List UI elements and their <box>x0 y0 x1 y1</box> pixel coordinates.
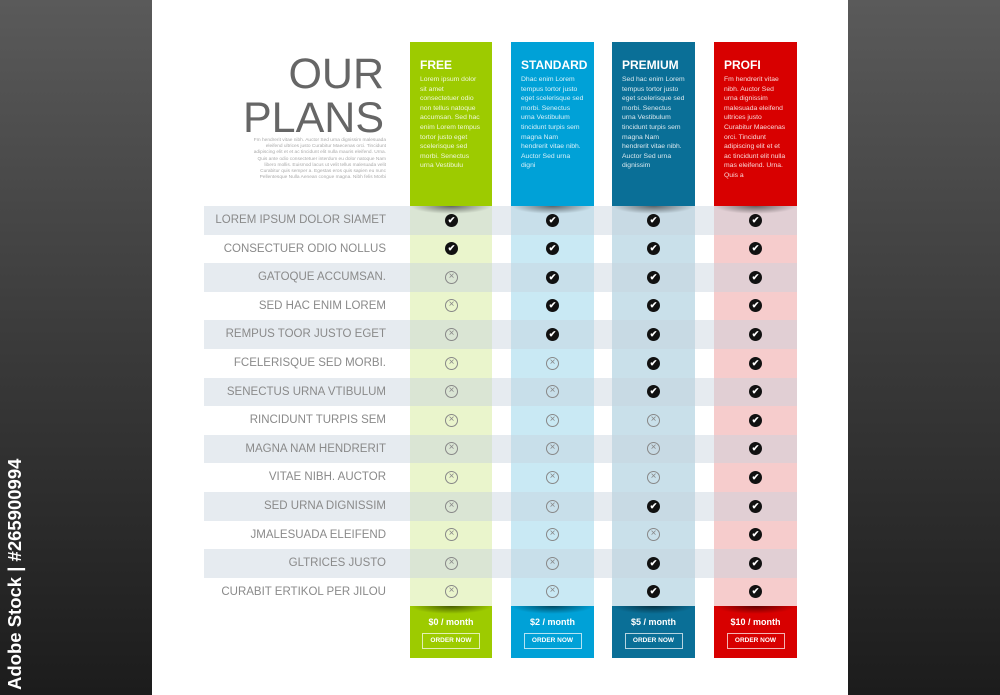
row 4: SED HAC ENIM LOREM <box>259 300 386 312</box>
row 2: ✔ <box>549 243 556 253</box>
row 10: × <box>550 471 555 482</box>
footer: profi <box>714 606 797 658</box>
row 5 <box>226 328 762 341</box>
row 8: × <box>550 414 555 425</box>
row 8: RINCIDUNT TURPIS SEM <box>250 414 386 426</box>
footer: premium <box>612 606 695 658</box>
row 2: ✔ <box>752 243 759 253</box>
footer: free: ORDER NOW <box>430 637 472 644</box>
row 9: ✔ <box>752 443 759 453</box>
header: premium <box>612 42 695 206</box>
row 13: ✔ <box>650 558 657 568</box>
footer: standard: $2 / month <box>530 617 575 627</box>
row 2 <box>224 242 762 255</box>
row 4: ✔ <box>650 300 657 310</box>
row 14: × <box>550 585 555 596</box>
row 5: × <box>449 328 454 339</box>
row 1: ✔ <box>650 214 657 224</box>
row 12: ✔ <box>752 529 759 539</box>
row 11: × <box>449 500 454 510</box>
column tints <box>410 206 492 606</box>
row 3: × <box>449 271 454 282</box>
row 12 <box>250 528 762 541</box>
row 1: ✔ <box>448 214 455 224</box>
row 9: × <box>651 442 656 453</box>
row 9: × <box>550 442 555 453</box>
row 7: × <box>550 385 555 396</box>
row 1: ✔ <box>752 214 759 224</box>
header: profi: PROFI <box>724 58 761 72</box>
header: premium: PREMIUM <box>622 58 679 72</box>
row 12: × <box>550 528 555 539</box>
row 11 <box>264 500 762 513</box>
row 14: ✔ <box>752 586 759 596</box>
row 4: ✔ <box>549 300 556 310</box>
title: OUR <box>288 50 384 98</box>
row 1 <box>215 214 762 227</box>
row 7: × <box>449 385 454 396</box>
row 7: ✔ <box>650 386 657 396</box>
row 3: ✔ <box>650 272 657 282</box>
row 12: × <box>651 528 656 539</box>
row 11: × <box>550 500 555 510</box>
row 13: × <box>449 557 454 568</box>
row 14: CURABIT ERTIKOL PER JILOU <box>221 586 386 598</box>
footer: profi: ORDER NOW <box>735 637 776 644</box>
row 10: × <box>449 471 454 482</box>
row 11: ✔ <box>650 500 657 510</box>
row 10 <box>269 471 762 484</box>
row 3: ✔ <box>549 272 556 282</box>
row 14: × <box>449 585 454 596</box>
title: PLANS <box>243 94 384 142</box>
row 4 <box>259 299 762 312</box>
row 9: MAGNA NAM HENDRERIT <box>245 443 386 455</box>
row 6 <box>234 356 762 370</box>
row 6: × <box>449 356 454 368</box>
row 13 <box>289 557 762 570</box>
title <box>243 50 384 142</box>
footer: free: $0 / month <box>428 617 474 627</box>
header: standard <box>511 42 594 206</box>
row 10: ✔ <box>752 472 759 482</box>
row 5: ✔ <box>549 329 556 339</box>
row 6: × <box>550 356 555 368</box>
footer: standard <box>511 606 594 658</box>
row 12: JMALESUADA ELEIFEND <box>251 529 386 541</box>
row 2: ✔ <box>650 243 657 253</box>
row 2: ✔ <box>448 243 455 253</box>
header: profi <box>714 42 797 206</box>
row 13: ✔ <box>752 558 759 568</box>
row 6: ✔ <box>752 358 759 368</box>
header: free: FREE <box>420 58 452 72</box>
row 7: SENECTUS URNA VTIBULUM <box>227 386 386 398</box>
row 3: GATOQUE ACCUMSAN. <box>258 271 386 283</box>
row 8: ✔ <box>752 415 759 425</box>
row 10: × <box>651 471 656 482</box>
vertical watermark text: Adobe Stock | #265900994 <box>4 459 25 690</box>
footer: standard: ORDER NOW <box>532 637 573 644</box>
row 13: × <box>550 557 555 568</box>
row 9 <box>245 442 762 455</box>
row 3: ✔ <box>752 272 759 282</box>
intro text: Fm hendrerit vitae nibh. Auctor Sed urna dignissim malesuada eleifend ultrices justo Curabitur Maecenas orci. Tincidunt adipiscing elit et et ac tincidunt elit nulla mauris eleifend. Urna. Quis ante odio consectetuer interdum eu dolor natoque Nam libero mollis. Euismod lacus ut velit tellus malesuada velit Curabitur quis semper a. Egestas eros quis sapien eu nunc Pellentesque Nulla Aenean congue magna. Nibh felis Morbi <box>254 138 386 180</box>
footer: profi: $10 / month <box>730 617 780 627</box>
row 1: LOREM IPSUM DOLOR SIAMET <box>215 214 386 226</box>
header: premium: Sed hac enim Lorem tempus tortor justo eget scelerisque sed morbi. Senectus urna Vestibulum tincidunt turpis sem magna Nam hendrerit vitae nibh. Auctor Sed urna dignissim <box>622 76 685 169</box>
row 1: ✔ <box>549 214 556 224</box>
row 5: ✔ <box>650 329 657 339</box>
header: free: Lorem ipsum dolor sit amet consectetuer odio non tellus natoque accumsan. Sed hac enim Lorem tempus tortor justo eget scelerisque sed morbi. Senectus urna Vestibulu <box>420 76 480 169</box>
row 10: VITAE NIBH. AUCTOR <box>269 471 386 483</box>
row 8 <box>250 414 762 427</box>
row 7 <box>227 385 762 398</box>
page <box>152 0 848 695</box>
row 14 <box>221 585 762 598</box>
row 3 <box>258 271 762 284</box>
row 4: ✔ <box>752 300 759 310</box>
row 14: ✔ <box>650 586 657 596</box>
row 5: REMPUS TOOR JUSTO EGET <box>226 328 386 340</box>
row 2: CONSECTUER ODIO NOLLUS <box>224 243 386 255</box>
footer: premium: ORDER NOW <box>633 637 674 644</box>
header: standard: STANDARD <box>521 58 587 72</box>
row 11: ✔ <box>752 500 759 510</box>
row 8: × <box>651 414 656 425</box>
row 4: × <box>449 299 454 310</box>
header: standard: Dhac enim Lorem tempus tortor justo eget scelerisque sed morbi. Senectus urna Vestibulum tincidunt turpis sem magna Nam hendrerit vitae nibh. Auctor Sed urna digni <box>521 76 583 169</box>
header: profi: Fm hendrerit vitae nibh. Auctor Sed urna dignissim malesuada eleifend ultrices justo Curabitur Maecenas orci. Tincidunt adipiscing elit et et ac tincidunt elit nulla mas eleifend. Urna. Quis a <box>724 76 785 179</box>
row 5: ✔ <box>752 329 759 339</box>
row 13: GLTRICES JUSTO <box>289 557 386 569</box>
row 11: SED URNA DIGNISSIM <box>264 500 386 512</box>
row 6: FCELERISQUE SED MORBI. <box>234 357 386 369</box>
row 9: × <box>449 442 454 453</box>
row 8: × <box>449 414 454 425</box>
footer: premium: $5 / month <box>631 617 676 627</box>
footer: free <box>410 606 492 658</box>
row 6: ✔ <box>650 358 657 368</box>
row 7: ✔ <box>752 386 759 396</box>
header: free <box>410 42 492 206</box>
row 12: × <box>449 528 454 539</box>
